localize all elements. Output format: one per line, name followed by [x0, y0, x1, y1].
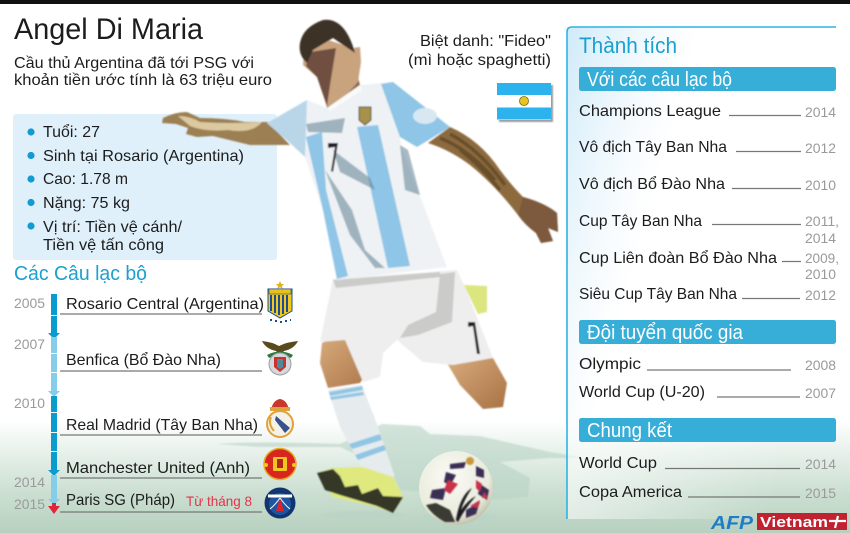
heading: achievements: Thành tích — [579, 33, 677, 58]
panel: personal facts: Tuổi: 27 — [43, 123, 100, 141]
finals list: Copa America — [579, 484, 682, 501]
club honours list: 2012 — [805, 140, 836, 156]
section bar: national team: Đội tuyển quốc gia — [587, 322, 744, 344]
shorts number — [468, 322, 480, 354]
finals list: 2015 — [805, 485, 836, 501]
section bar: clubs: Với các câu lạc bộ — [587, 69, 732, 91]
timeline years: 2015 — [14, 496, 45, 512]
club honours list: 2010 — [805, 266, 836, 282]
panel: personal facts: Sinh tại Rosario (Argentina) — [43, 148, 244, 165]
club honours list: 2010 — [805, 177, 836, 193]
timeline arrow bar — [48, 294, 60, 514]
logo: Vietnam+ — [757, 513, 847, 531]
club honours list: 2014 — [805, 104, 836, 120]
logo: Vietnam+: Vietnam — [760, 514, 828, 531]
club honours list: Vô địch Tây Ban Nha — [579, 139, 727, 156]
timeline years — [14, 295, 45, 512]
club honours list: Champions League — [579, 103, 721, 120]
player right arm — [428, 127, 558, 243]
finals list: 2014 — [805, 456, 836, 472]
title: Angel Di Maria — [14, 13, 203, 46]
heading: clubs: Các Câu lạc bộ — [14, 263, 147, 285]
club list: Real Madrid (Tây Ban Nha) — [66, 417, 258, 434]
club list — [60, 296, 264, 512]
boot dark studs — [317, 469, 403, 513]
finals list: World Cup — [579, 455, 657, 472]
club list: Manchester United (Anh) — [66, 460, 250, 477]
nickname — [408, 33, 551, 69]
left thigh — [320, 335, 380, 388]
icon: Real Madrid crest — [267, 399, 293, 437]
panel: achievements — [567, 27, 839, 519]
national team honours list: Olympic — [579, 356, 641, 373]
icon: Manchester United crest — [264, 448, 296, 480]
club list: Benfica (Bổ Đào Nha) — [66, 351, 221, 369]
shirt badge — [359, 107, 371, 125]
player left arm — [162, 112, 290, 145]
national team honours list: 2007 — [805, 385, 836, 401]
ground shadows — [217, 424, 585, 522]
club honours list: 2011, — [805, 213, 839, 229]
club list: Paris SG (Pháp) — [66, 492, 175, 509]
panel: personal facts: Cao: 1.78 m — [43, 171, 128, 188]
club honours list: Siêu Cup Tây Ban Nha — [579, 286, 737, 303]
panel: personal facts: Vị trí: Tiền vệ cánh/ — [43, 219, 183, 236]
section bar: finals: Chung kết — [587, 420, 672, 442]
shirt — [267, 82, 450, 280]
club honours list: 2009, — [805, 250, 839, 266]
panel: personal facts: Nặng: 75 kg — [43, 195, 130, 212]
timeline years: 2010 — [14, 395, 45, 411]
face — [303, 38, 361, 107]
panel: personal facts — [13, 114, 277, 260]
national team honours list: 2008 — [805, 357, 836, 373]
right boot peek — [464, 285, 487, 314]
player photo illustration — [162, 20, 558, 513]
left sleeve — [267, 100, 307, 157]
club list: Từ tháng 8 — [186, 493, 252, 509]
subtitle: Cầu thủ Argentina đã tới PSG với — [14, 55, 254, 72]
finals list — [579, 455, 836, 501]
icon: Argentina flag — [497, 83, 553, 122]
section bar: national team — [579, 320, 836, 344]
logo: AFP: AFP — [710, 513, 754, 533]
club honours list: Cup Liên đoàn Bổ Đào Nha — [579, 249, 777, 267]
national team honours list: World Cup (U-20) — [579, 384, 705, 401]
left arm highlight — [178, 116, 262, 131]
shirt number — [328, 143, 338, 172]
club honours list: 2014 — [805, 230, 836, 246]
right hand — [518, 197, 558, 243]
right knee — [447, 358, 507, 409]
subtitle — [14, 55, 272, 89]
face shadow — [306, 48, 336, 106]
timeline years: 2014 — [14, 474, 45, 490]
club honours list: Vô địch Bổ Đào Nha — [579, 175, 725, 193]
right arm tattoos — [440, 134, 505, 190]
national team honours list — [579, 356, 836, 401]
timeline years: 2007 — [14, 336, 45, 352]
section bar: finals — [579, 418, 836, 442]
section bar: clubs — [579, 67, 836, 91]
club honours list: Cup Tây Ban Nha — [579, 213, 702, 230]
club list: Rosario Central (Argentina) — [66, 296, 264, 313]
collar — [327, 85, 362, 111]
nickname: Biệt danh: "Fideo" — [420, 33, 551, 50]
timeline years: 2005 — [14, 295, 45, 311]
shirt folds — [306, 118, 420, 268]
icon: Benfica crest — [262, 341, 298, 375]
club honours list — [579, 103, 839, 303]
shorts shadows — [333, 272, 455, 338]
icon: Paris Saint-Germain crest — [264, 488, 296, 518]
panel: personal facts: Tiền vệ tấn công — [43, 237, 164, 254]
nickname: (mì hoặc spaghetti) — [408, 52, 551, 69]
hair — [300, 20, 355, 63]
icon: Rosario Central crest — [268, 281, 292, 322]
subtitle: khoản tiền ước tính là 63 triệu euro — [14, 72, 272, 89]
sleeve patch — [413, 108, 437, 124]
club honours list: 2012 — [805, 287, 836, 303]
shorts — [320, 270, 493, 382]
shirt blue stripes — [306, 82, 450, 279]
left boot — [317, 467, 403, 513]
soccer ball — [419, 451, 493, 525]
left sock — [328, 385, 395, 477]
sock stripes — [329, 386, 386, 460]
neck — [322, 78, 360, 108]
